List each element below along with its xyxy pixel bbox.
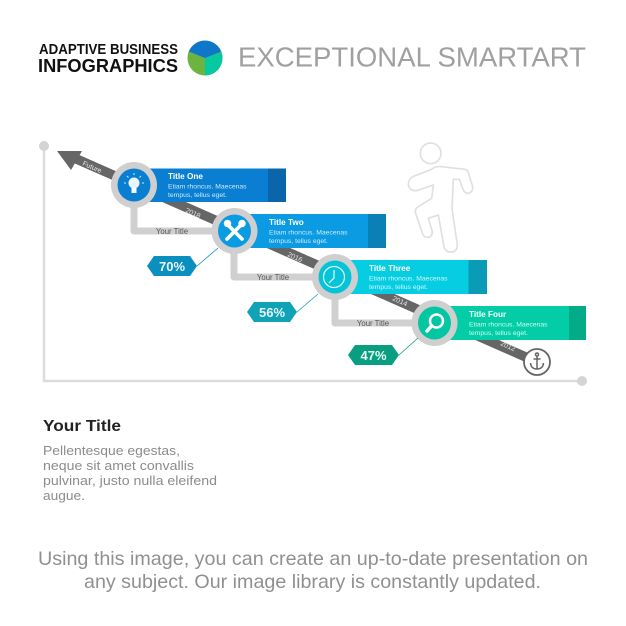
panel: step two: Etiam rhoncus. Maecenas <box>269 230 348 236</box>
arrow year labels: 2012 <box>499 340 516 353</box>
header brand text: INFOGRAPHICS <box>38 55 178 76</box>
panel: step four: tempus, tellus eget. <box>469 330 528 337</box>
arrow year labels: 2014 <box>391 295 408 308</box>
text block: your title: Pellentesque egestas, <box>43 444 180 458</box>
callout: 70%: 70% <box>159 259 185 274</box>
arrow year labels: 2018 <box>184 207 201 220</box>
callout: 56% <box>247 294 318 322</box>
callout: 47%: 47% <box>360 348 387 363</box>
icon: running person outline <box>408 143 473 252</box>
panel: step four <box>412 300 586 346</box>
panel: step one: tempus, tellus eget. <box>168 192 227 199</box>
arrow year labels: Future <box>81 160 103 175</box>
panel: step three: Title Three <box>369 264 411 273</box>
icon: tools <box>224 220 245 239</box>
panel: step three <box>312 254 487 300</box>
connectors <box>134 200 420 323</box>
callout: 56%: 56% <box>259 305 285 320</box>
text block: your title: augue. <box>43 489 85 503</box>
icon: anchor <box>524 349 550 375</box>
icon: light bulb <box>124 173 144 193</box>
text block: your title <box>43 418 217 503</box>
panel: step two: Title Two <box>269 218 304 227</box>
footer description: any subject. Our image library is constantly updated. <box>84 571 541 593</box>
connector labels: Your Title <box>357 319 389 328</box>
icon: magnifier <box>427 314 443 331</box>
panel: step four: Title Four <box>469 310 507 319</box>
connector labels: Your Title <box>257 273 289 282</box>
panel: step four: Etiam rhoncus. Maecenas <box>469 322 548 328</box>
footer description <box>38 548 588 593</box>
icon: clock <box>324 266 344 288</box>
panel: step three: Etiam rhoncus. Maecenas <box>369 276 448 282</box>
footer description: Using this image, you can create an up-to-date presentation on <box>38 548 588 570</box>
panel: step one: Etiam rhoncus. Maecenas <box>168 184 247 190</box>
panel: step one <box>111 162 286 208</box>
connector labels <box>156 227 389 328</box>
timeline arrow <box>57 151 537 362</box>
text block: your title: Your Title <box>43 418 121 435</box>
panel: step three: tempus, tellus eget. <box>369 284 428 291</box>
panel: step two <box>212 208 386 254</box>
arrow year labels <box>81 160 516 353</box>
header brand text: ADAPTIVE BUSINESS <box>39 42 178 58</box>
callout: 47% <box>348 338 418 365</box>
callout: 70% <box>147 248 218 276</box>
panel: step one: Title One <box>168 172 203 181</box>
chart axes <box>39 141 587 386</box>
main title: EXCEPTIONAL SMARTART <box>238 42 586 72</box>
arrow year labels: 2016 <box>286 251 303 264</box>
icon: logo cube circle <box>188 40 223 76</box>
header brand text <box>38 42 178 76</box>
text block: your title: neque sit amet convallis <box>43 459 194 473</box>
panel: step two: tempus, tellus eget. <box>269 238 328 245</box>
text block: your title: pulvinar, justo nulla eleifend <box>43 474 217 488</box>
connector labels: Your Title <box>156 227 188 236</box>
